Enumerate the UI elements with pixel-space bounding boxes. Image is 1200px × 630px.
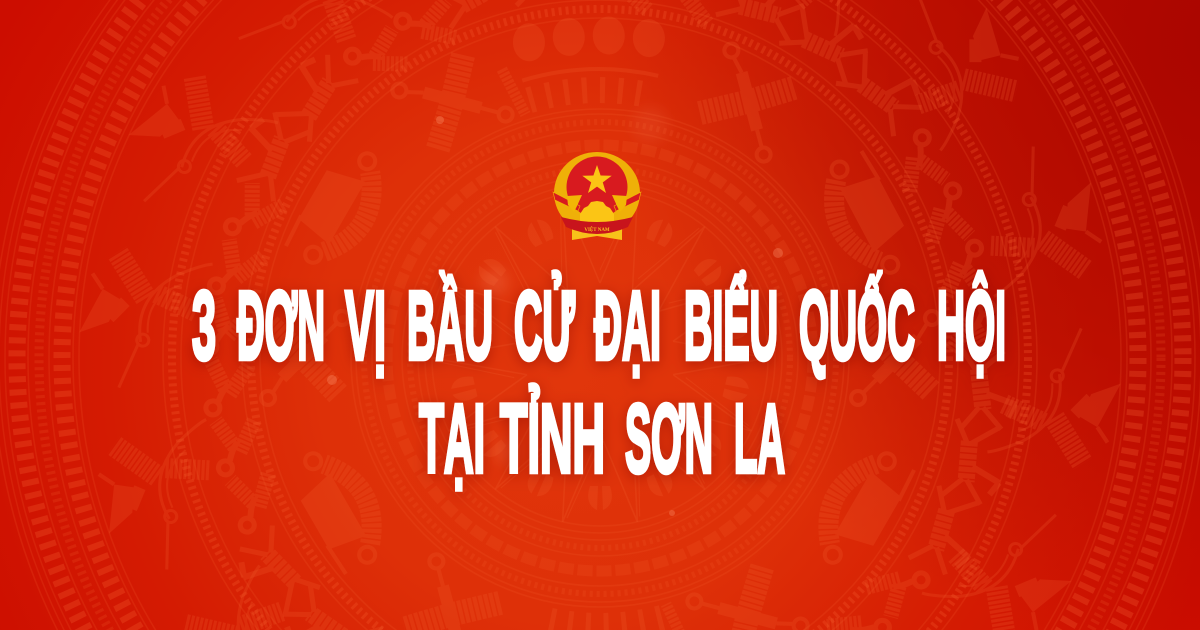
- national emblem of Vietnam: [553, 152, 641, 240]
- emblem: red disc: [566, 156, 628, 218]
- title line 1: VỊ: [345, 271, 386, 380]
- emblem: red side ribbons: [553, 192, 641, 211]
- emblem: gold cog: [580, 201, 614, 222]
- emblem: banner text: VIỆT NAM: [584, 227, 610, 233]
- title line 2: TẠI: [419, 384, 485, 493]
- emblem: gold wreath: [554, 152, 640, 234]
- emblem: red banner: [561, 217, 633, 234]
- infographic canvas: HỘI: [937, 271, 1006, 380]
- title line 1: BIỂU: [684, 271, 778, 380]
- title line 1: BẦU: [407, 271, 493, 380]
- title line 2: [419, 384, 785, 493]
- emblem: ribbon tail: [572, 229, 622, 240]
- title line 1: [192, 271, 1006, 380]
- emblem: gold rice sheaves: [567, 195, 627, 212]
- title line 1: CỬ: [514, 271, 575, 380]
- emblem: gold star: [582, 165, 612, 193]
- title: LA: [734, 384, 785, 493]
- title line 1: QUỐC: [799, 271, 915, 380]
- title: [192, 271, 1006, 493]
- title line 1: ĐẠI: [594, 271, 661, 380]
- soft light specks: [327, 107, 783, 516]
- title line 2: TỈNH: [500, 384, 605, 493]
- title line 1: 3: [192, 271, 216, 380]
- title line 1: ĐƠN: [237, 271, 325, 380]
- title line 2: SƠN: [625, 384, 713, 493]
